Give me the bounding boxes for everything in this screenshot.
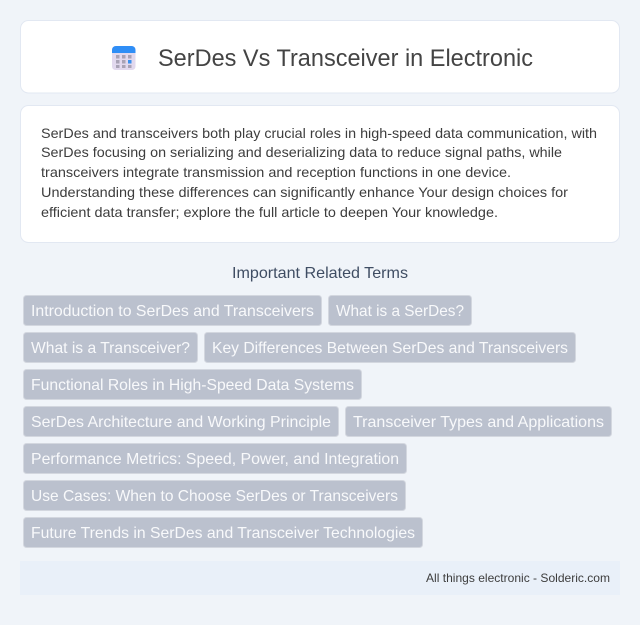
tag: key differences [204, 332, 576, 362]
tag: transceiver types [346, 406, 612, 436]
tag: architecture [24, 406, 338, 436]
tag: use cases [24, 480, 406, 510]
tag: future trends [24, 518, 422, 548]
panel: title card [20, 20, 620, 93]
summary text: efficient data transfer; explore the full article to deepen Your knowledge. [41, 204, 498, 220]
tag: transceiver types: Transceiver Types and Applications [353, 414, 604, 431]
tag: introduction [24, 296, 322, 326]
summary text: SerDes focusing on serializing and deserializing data to reduce signal paths, while [41, 144, 562, 160]
summary text: transceivers integrate transmission and reception functions in one device. [41, 164, 511, 180]
tag: architecture: SerDes Architecture and Working Principle [31, 414, 331, 431]
panel: summary [20, 106, 620, 242]
tag: what is transceiver [24, 332, 198, 362]
tag: functional roles [24, 370, 362, 400]
tag: what is serdes [328, 296, 472, 326]
tag: introduction: Introduction to SerDes and Transceivers [31, 303, 314, 320]
summary text [41, 125, 597, 220]
summary text: Understanding these differences can significantly enhance Your design choices for [41, 184, 568, 200]
tag: what is transceiver: What is a Transceiver? [31, 340, 190, 357]
tag: what is serdes: What is a SerDes? [336, 303, 464, 320]
icon: calendar [112, 46, 136, 70]
tag: key differences: Key Differences Between SerDes and Transceivers [212, 340, 568, 357]
heading: related terms: Important Related Terms [232, 265, 408, 282]
tag: functional roles: Functional Roles in High-Speed Data Systems [31, 377, 354, 394]
tag: performance metrics: Performance Metrics: Speed, Power, and Integration [31, 451, 399, 468]
footer bar [20, 561, 620, 595]
footer credit: All things electronic - Solderic.com [426, 571, 610, 585]
title: SerDes Vs Transceiver in Electronic [158, 45, 533, 72]
tag: performance metrics [24, 444, 406, 474]
tag: use cases: Use Cases: When to Choose SerDes or Transceivers [31, 488, 398, 505]
tag: future trends: Future Trends in SerDes and Transceiver Technologies [31, 525, 415, 542]
summary text: SerDes and transceivers both play crucial roles in high-speed data communication, with [41, 125, 597, 141]
